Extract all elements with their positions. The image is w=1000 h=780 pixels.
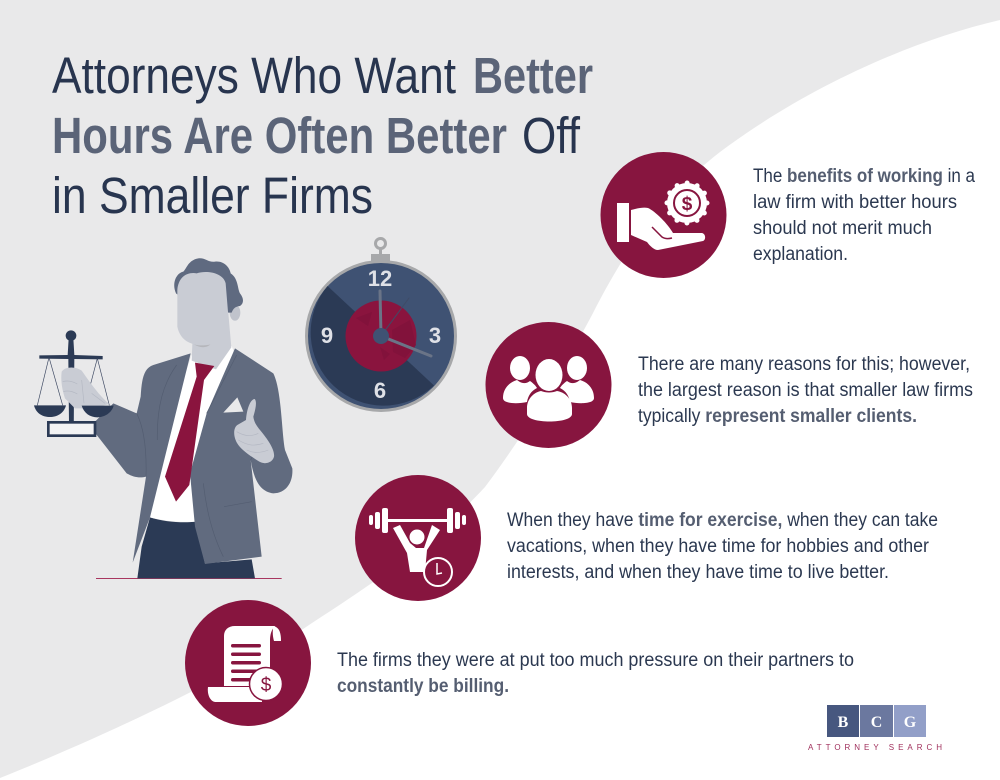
text: benefits of better hours: should not merit much <box>753 218 932 239</box>
text: benefits of better hours: explanation. <box>753 244 848 265</box>
clock hub <box>373 328 389 344</box>
title: Off <box>522 107 581 164</box>
map shadows <box>356 312 416 360</box>
clock numerals: 6 <box>374 378 386 403</box>
title: Hours Are Often Better <box>52 107 507 164</box>
text: time for exercise: vacations, when they have time for hobbies and other <box>507 536 930 557</box>
icon: hand with dollar badge <box>600 152 726 278</box>
icon: bill scroll with dollar coin <box>185 600 311 726</box>
logo: BCG Attorney Search: B <box>838 714 849 731</box>
logo: BCG Attorney Search: C <box>871 714 882 731</box>
text: time for exercise: When they have time for exercise, when they can take <box>507 510 938 531</box>
icon: group of people <box>486 322 612 448</box>
illustration: attorney holding scales <box>34 258 292 579</box>
text: time for exercise: interests, and when they have time to live better. <box>507 562 889 583</box>
title: Attorneys Who Want <box>52 47 456 104</box>
title: in Smaller Firms <box>52 167 373 224</box>
clock numerals: 3 <box>429 323 441 348</box>
trousers <box>137 517 255 578</box>
text: smaller clients: typically represent smaller clients. <box>638 406 917 427</box>
text: benefits of better hours: The benefits of working in a <box>753 166 975 187</box>
text: smaller clients: There are many reasons for this; however, <box>638 354 970 375</box>
pocket square <box>223 397 243 413</box>
text: pressure of billing <box>337 650 854 697</box>
jacket <box>93 348 292 564</box>
logo: BCG Attorney Search: G <box>904 714 917 731</box>
icon: bill scroll with dollar coin: $ <box>261 675 272 696</box>
logo: BCG Attorney Search: ATTORNEY SEARCH <box>808 743 942 752</box>
title <box>52 47 593 224</box>
icon: hand with dollar badge: $ <box>682 194 693 215</box>
clock numerals: 9 <box>321 323 333 348</box>
ground line <box>96 578 282 579</box>
clock hands <box>380 291 431 356</box>
text: pressure of billing: constantly be billing. <box>337 676 509 697</box>
hand: thumbs up <box>234 399 274 463</box>
icon: weightlifter with clock <box>355 475 481 601</box>
jacket seams <box>137 355 258 557</box>
title: Better <box>473 47 593 104</box>
text: benefits of better hours: law firm with better hours <box>753 192 957 213</box>
text: smaller clients <box>638 354 973 427</box>
dark half of face <box>311 286 434 406</box>
scale pans and base <box>34 405 114 436</box>
text: smaller clients: the largest reason is that smaller law firms <box>638 380 973 401</box>
hand holding scales <box>61 368 109 408</box>
logo: BCG Attorney Search <box>808 705 942 752</box>
clock numerals: 12 <box>368 266 392 291</box>
clock face <box>306 262 456 410</box>
stopwatch clock <box>306 238 456 410</box>
text: time for exercise <box>507 510 938 583</box>
neck and head <box>174 258 243 369</box>
clock numerals <box>321 266 441 403</box>
world disc <box>346 300 416 372</box>
white shirt <box>150 346 235 522</box>
necktie <box>165 363 214 502</box>
text: pressure of billing: The firms they were at put too much pressure on their partners to <box>337 650 854 671</box>
clock crown <box>371 238 390 263</box>
text: benefits of better hours <box>753 166 975 265</box>
scale sword and strings <box>37 330 109 423</box>
